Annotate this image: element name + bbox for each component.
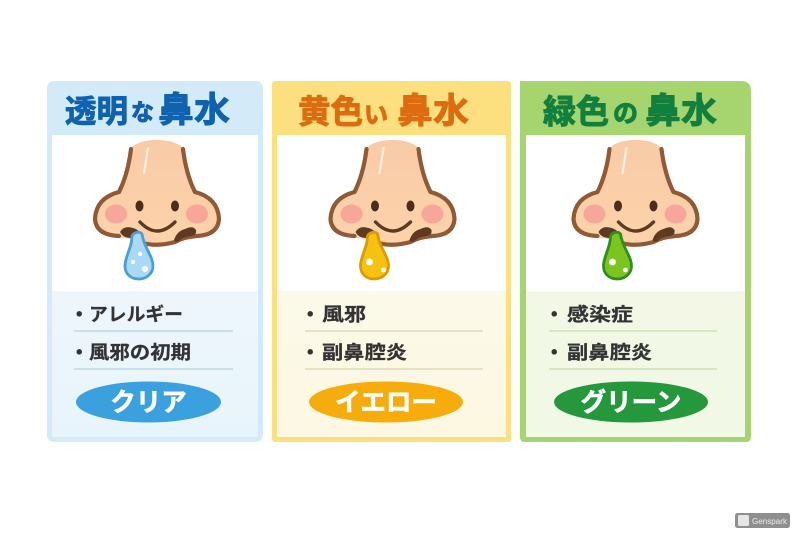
heading: yellow [298, 92, 469, 131]
heading: green [543, 92, 717, 131]
list item: cold: • [307, 303, 313, 324]
icon: nose with green drop [572, 140, 700, 279]
panel background: lower section [277, 291, 506, 437]
heading: clear: 透明 [65, 93, 128, 129]
list item: early cold: 風邪の初期 [89, 342, 191, 363]
list item: sinusitis: 副鼻腔炎 [567, 342, 652, 363]
pill: clear: クリア [110, 389, 187, 417]
panel background: lower section [52, 291, 258, 437]
illustration background [52, 135, 258, 291]
heading: green: 緑色 [543, 93, 609, 130]
panel: yellow mucus [272, 81, 511, 442]
list item: infection [551, 303, 633, 325]
list item: sinusitis: • [551, 341, 557, 362]
list item: early cold: • [76, 341, 82, 362]
watermark badge: Genspark [752, 517, 788, 526]
heading: yellow: 黄色 [298, 94, 363, 130]
pill: yellow: イエロー [335, 389, 437, 417]
pill: green [554, 382, 708, 422]
heading: yellow: 鼻水 [397, 92, 469, 131]
pill: green: グリーン [581, 388, 681, 417]
pill: yellow [309, 382, 463, 422]
heading: yellow: い [364, 102, 388, 129]
icon: nose with clear drop [93, 140, 221, 279]
panel background: lower section [526, 291, 745, 437]
heading: green: 鼻水 [645, 92, 717, 131]
icon: nose with yellow drop [328, 140, 456, 279]
list item: allergy: アレルギー [89, 304, 183, 325]
panel: green mucus [520, 81, 751, 442]
list item: infection: • [551, 303, 557, 324]
panel: clear mucus [47, 81, 263, 442]
heading: clear [65, 91, 230, 130]
illustration background [526, 135, 745, 291]
heading: green: の [613, 100, 638, 128]
illustration background [277, 135, 506, 291]
list item: cold [307, 303, 366, 325]
list item: sinusitis: • [307, 341, 313, 362]
pill: clear [76, 382, 221, 422]
list item: cold: 風邪 [322, 304, 366, 325]
heading: clear: な [131, 99, 154, 125]
heading: clear: 鼻水 [158, 91, 230, 130]
list item: sinusitis: 副鼻腔炎 [322, 342, 407, 363]
list item: sinusitis [551, 341, 652, 363]
watermark badge [735, 513, 790, 528]
list item: allergy: • [76, 303, 82, 324]
list item: infection: 感染症 [567, 304, 633, 325]
